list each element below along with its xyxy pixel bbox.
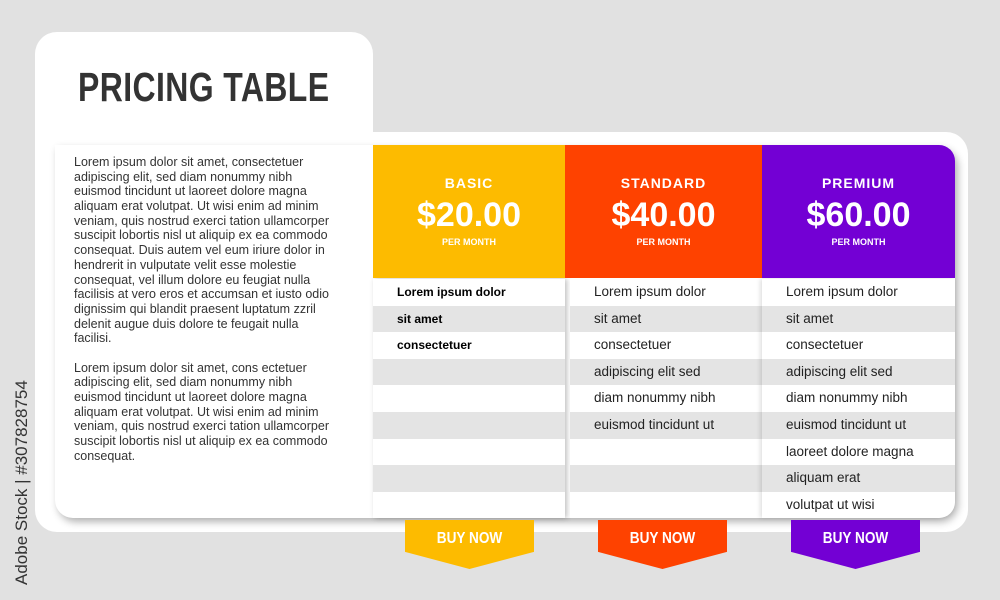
description text: Lorem ipsum dolor sit amet, consectetuer — [74, 155, 303, 169]
column 2 — [570, 284, 762, 492]
button: purple — [791, 520, 920, 569]
header: premium: $60.00 — [806, 196, 910, 234]
header: basic — [373, 145, 565, 278]
column 3: sit amet — [786, 311, 833, 326]
header: basic: PER MONTH — [442, 237, 496, 247]
description text: dignissim qui blandit praesent luptatum zzril — [74, 302, 316, 316]
header: basic: BASIC — [445, 175, 493, 191]
description text: aliquam erat volutpat. Ut wisi enim ad minim — [74, 199, 319, 213]
column 3: diam nonummy nibh — [786, 390, 908, 405]
description text: suscipit lobortis nisl ut aliquip ex ea commodo — [74, 228, 328, 242]
column 3: volutpat ut wisi — [786, 497, 875, 512]
column 3: euismod tincidunt ut — [786, 417, 906, 432]
column 2: Lorem ipsum dolor — [594, 284, 706, 299]
description text: adipiscing elit, sed diam nonummy nibh — [74, 170, 292, 184]
description text: Lorem ipsum dolor sit amet, cons ectetuer — [74, 361, 307, 375]
column 1 — [373, 279, 565, 518]
column 3: Lorem ipsum dolor — [786, 284, 898, 299]
description text: consequat. — [74, 449, 135, 463]
description text: facilisis at vero eros et accumsan et iusto odio — [74, 287, 329, 301]
column 1: consectetuer — [397, 338, 472, 352]
description text: consequat. Duis autem vel eum iriure dolor in — [74, 243, 325, 257]
description text — [74, 155, 329, 463]
column 3: laoreet dolore magna — [786, 444, 914, 459]
column 1: Lorem ipsum dolor — [397, 285, 506, 299]
column 2: consectetuer — [594, 337, 671, 352]
description text: euismod tincidunt ut laoreet dolore magna — [74, 390, 307, 404]
button: purple: BUY NOW — [823, 530, 888, 547]
column 3: consectetuer — [786, 337, 863, 352]
description text: facilisi. — [74, 331, 112, 345]
title: PRICING TABLE — [78, 64, 329, 110]
column 2: adipiscing elit sed — [594, 364, 701, 379]
header: standard: PER MONTH — [636, 237, 690, 247]
description text: veniam, quis nostrud exerci tation ullamcorper — [74, 419, 329, 433]
description text: aliquam erat volutpat. Ut wisi enim ad minim — [74, 405, 319, 419]
description text: delenit augue duis dolore te feugait nulla — [74, 317, 298, 331]
header: standard: STANDARD — [621, 175, 706, 191]
inner card — [55, 145, 955, 518]
outer white panel — [35, 32, 373, 532]
header: premium — [762, 145, 955, 278]
header: basic: $20.00 — [417, 196, 521, 234]
description text: hendrerit in vulputate velit esse molestie — [74, 258, 296, 272]
button: yellow: BUY NOW — [437, 530, 502, 547]
button: orange — [598, 520, 727, 569]
column 2: sit amet — [594, 311, 641, 326]
header: standard — [565, 145, 762, 278]
description text: veniam, quis nostrud exerci tation ullamcorper — [74, 214, 329, 228]
column 2: euismod tincidunt ut — [594, 417, 714, 432]
button: yellow — [405, 520, 534, 569]
column 3: aliquam erat — [786, 470, 860, 485]
column 3 — [762, 279, 955, 518]
column 2: diam nonummy nibh — [594, 390, 716, 405]
column 3: adipiscing elit sed — [786, 364, 893, 379]
column 1: sit amet — [397, 312, 442, 326]
description text: suscipit lobortis nisl ut aliquip ex ea commodo — [74, 434, 328, 448]
header: premium: PREMIUM — [822, 175, 895, 191]
header: premium: PER MONTH — [832, 237, 886, 247]
description text: adipiscing elit, sed diam nonummy nibh — [74, 375, 292, 389]
description text: euismod tincidunt ut laoreet dolore magna — [74, 184, 307, 198]
vertical credit: Adobe Stock | #307828754 — [12, 380, 31, 585]
button: orange: BUY NOW — [630, 530, 695, 547]
description text: consequat, vel illum dolore eu feugiat nulla — [74, 272, 310, 286]
header: standard: $40.00 — [612, 196, 716, 234]
